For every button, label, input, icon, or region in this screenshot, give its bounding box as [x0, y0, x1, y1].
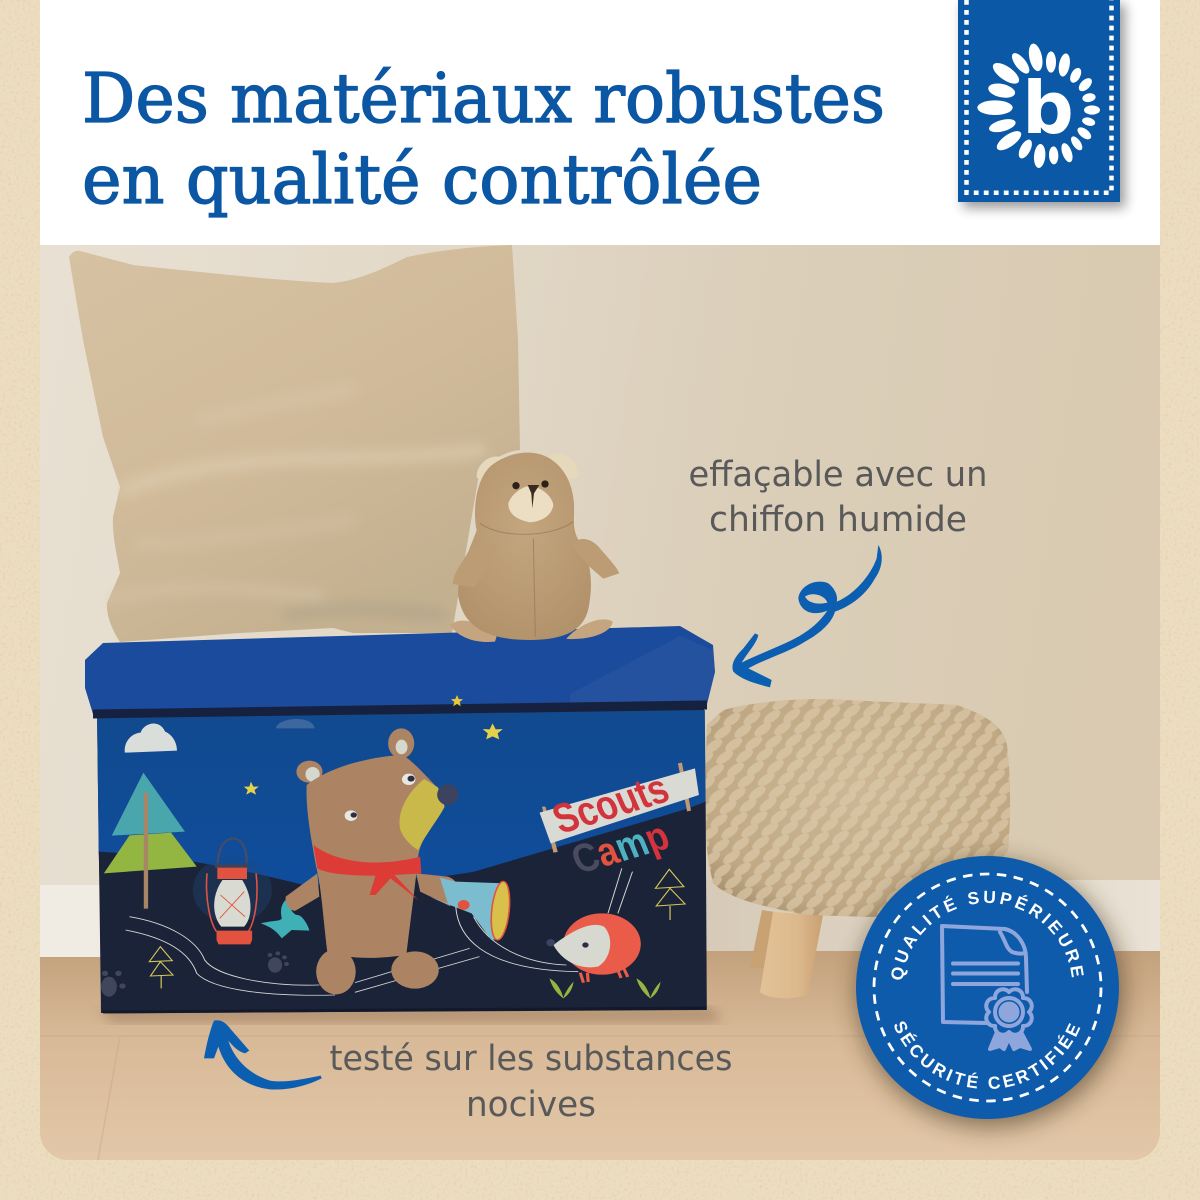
plush nose: [528, 485, 539, 508]
stool cushion: [704, 699, 1010, 917]
box shadow on floor: [100, 1008, 722, 1022]
plush body and head: [458, 453, 591, 640]
caption: effaçable: chiffon humide: [709, 500, 967, 540]
caption: testé: testé sur les substances: [330, 1039, 732, 1079]
title: [82, 60, 885, 220]
teal plant: [261, 900, 309, 938]
hedgehog: [546, 913, 641, 983]
header panel: [40, 0, 1160, 246]
lantern: [193, 838, 272, 944]
wall: [40, 245, 1160, 885]
flashlight: [430, 878, 512, 941]
ground: [99, 802, 707, 1013]
photo panel: [40, 245, 1160, 1160]
small trees: [149, 869, 685, 988]
badge text: SÉCURITÉ CERTIFIÉE: [894, 1021, 1080, 1089]
tree: [104, 773, 197, 909]
arrow: to the box bottom: [204, 1020, 322, 1090]
grass sprouts: [549, 978, 661, 998]
sign: Scouts: Scouts: [545, 765, 676, 843]
badge text: [891, 890, 1084, 1089]
plush ears: [476, 455, 552, 480]
storage box: [85, 626, 715, 1013]
road lines: [126, 868, 632, 995]
right baseboard: [822, 880, 1160, 951]
caption: effaçable: [688, 455, 988, 540]
stool legs: [750, 910, 775, 968]
box lid: [85, 626, 715, 714]
plush eyes: [512, 482, 520, 489]
wooden floor: [40, 951, 1160, 1162]
title: en qualité contrôlée: [82, 141, 762, 220]
pillow folds: [122, 444, 484, 618]
text: camp: Camp: [565, 813, 676, 883]
pillow: [69, 245, 520, 642]
paw prints: [101, 951, 289, 997]
box front base: [97, 702, 706, 1013]
logo label: brand flower: [958, 0, 1125, 208]
plush bear: [450, 453, 619, 642]
plush feet: [450, 619, 613, 642]
arrow: to the lid: [732, 545, 882, 687]
plush seams: [480, 522, 573, 637]
left baseboard: [40, 885, 102, 957]
caption: testé: nocives: [466, 1085, 596, 1125]
lid star: [451, 695, 463, 706]
caption: testé: [330, 1039, 732, 1125]
ghost cloud: [276, 719, 315, 728]
title: Des matériaux robustes: [82, 60, 885, 139]
caption: effaçable: effaçable avec un: [688, 455, 988, 495]
sky: [97, 710, 706, 887]
stars: [244, 723, 503, 795]
bear: [286, 728, 459, 994]
plush arms: [453, 539, 619, 587]
sign: Scouts: [540, 763, 699, 853]
plush muzzle: [508, 486, 553, 522]
stool: [704, 699, 1010, 998]
cloud: [125, 724, 177, 753]
box front illustration: [97, 710, 707, 1013]
icon: certificate: [942, 926, 1032, 1049]
box bottom edge: [103, 1008, 706, 1012]
badge: quality seal: [842, 845, 1137, 1143]
logo letter b: b: [1022, 66, 1074, 150]
icon: flower petals: [977, 42, 1100, 168]
badge text: QUALITÉ SUPÉRIEURE: [891, 890, 1084, 980]
